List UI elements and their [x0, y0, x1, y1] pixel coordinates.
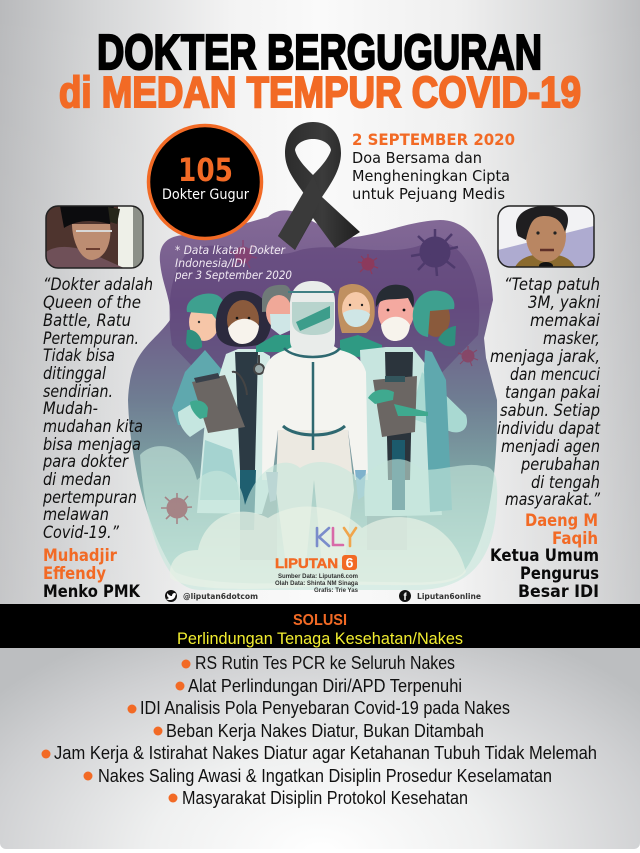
social: twitter: [165, 590, 258, 602]
speaker: Daeng M Faqih: Besar IDI: [518, 582, 599, 601]
person: man behind left: [256, 285, 292, 352]
icon: mourning ribbon: [278, 122, 360, 250]
illustration: dark shade behind team: [169, 240, 479, 385]
icon: small red virus: [358, 254, 378, 274]
stat circle: 105 dokter gugur: Dokter Gugur: [162, 187, 249, 203]
social: facebook: Liputan6online: [417, 591, 481, 601]
illustration: medical team: [172, 281, 467, 565]
illustration: translucent foreground clouds: [140, 446, 497, 590]
speaker: Daeng M Faqih: Daeng M: [525, 511, 598, 530]
icon: virus behind note: [230, 240, 257, 268]
quote: right: individu dapat: [497, 419, 600, 438]
quote: left: Mudah-: [43, 399, 98, 418]
note: data source: [174, 243, 292, 282]
speaker: Muhadjir Effendy: Muhadjir: [43, 546, 118, 565]
text: 2 september 2020: 2 SEPTEMBER 2020: [352, 130, 515, 149]
quote: right: tangan pakai: [505, 383, 600, 402]
quote: left: Queen of the: [43, 293, 141, 312]
item 4: Beban Kerja Nakes Diatur, Bukan Ditambah: [166, 721, 484, 741]
stat circle: 105 dokter gugur: 105: [178, 151, 233, 189]
quote: left: Battle, Ratu: [43, 311, 131, 330]
speaker: Daeng M Faqih: Ketua Umum: [490, 546, 599, 565]
item 7: Masyarakat Disiplin Protokol Kesehatan: [182, 788, 468, 808]
item 6: Nakes Saling Awasi & Ingatkan Disiplin Prosedur Keselamatan: [98, 766, 552, 786]
quote: left: [42, 275, 153, 542]
stat circle: 105 dokter gugur: [148, 126, 262, 238]
credits: Grafis: Trie Yas: [314, 587, 358, 594]
logo: Liputan6: LIPUTAN: [275, 555, 338, 571]
quote: right: menjaga jarak,: [490, 347, 600, 366]
quote: left: pertempuran: [42, 488, 137, 507]
person: blond woman: [338, 284, 382, 358]
speaker: Muhadjir Effendy: Effendy: [43, 564, 106, 583]
item 2: Alat Perlindungan Diri/APD Terpenuhi: [188, 676, 462, 696]
icon: red virus right: [458, 346, 478, 366]
speaker: Daeng M Faqih: Faqih: [552, 529, 598, 548]
quote: left: para dokter: [42, 452, 129, 471]
person: hazmat suit: [262, 281, 368, 565]
quote: left: bisa menjaga: [43, 435, 141, 454]
text: 2 september 2020: Mengheningkan Cipta: [352, 167, 510, 185]
panel header: solusi: Perlindungan Tenaga Kesehatan/Nakes: [177, 629, 463, 648]
quote: right: 3M, yakni: [528, 293, 600, 312]
person: left nurse: [172, 294, 226, 437]
quote: left: Pertempuran.: [43, 329, 139, 348]
background: [0, 0, 640, 604]
quote: right: sabun. Setiap: [500, 401, 600, 420]
speaker: Muhadjir Effendy: [43, 546, 141, 601]
note: data source: * Data Ikatan Dokter: [175, 243, 286, 257]
credits: Sumber Data: Liputan6.com: [278, 573, 358, 580]
quote: left: ditinggal: [43, 364, 106, 383]
note: data source: Indonesia/IDI: [175, 256, 247, 270]
social: twitter: @liputan6dotcom: [183, 591, 258, 601]
item 1: RS Rutin Tes PCR ke Seluruh Nakes: [195, 653, 455, 673]
text: 2 september 2020: [352, 130, 515, 203]
social: facebook: [399, 590, 481, 603]
quote: left: “Dokter adalah: [43, 275, 153, 294]
credits: [275, 573, 358, 594]
quote: left: Covid-19.”: [43, 523, 119, 542]
icon: faded virus lower left: [161, 493, 192, 524]
quote: right: masyarakat.”: [505, 490, 600, 509]
quote: right: perubahan: [520, 455, 600, 474]
quote: right: memakai: [530, 311, 600, 330]
text: 2 september 2020: untuk Pejuang Medis: [352, 185, 505, 203]
credits: Olah Data: Shinta NM Sinaga: [275, 580, 358, 587]
speaker: Daeng M Faqih: Pengurus: [520, 564, 599, 583]
speaker: Daeng M Faqih: [490, 511, 599, 601]
social: facebook: f: [403, 592, 407, 603]
quote: left: Tidak bisa: [43, 346, 115, 365]
icon: left clipboard: [190, 373, 245, 433]
photo: Daeng M Faqih: [498, 206, 594, 270]
note: data source: per 3 September 2020: [174, 268, 292, 282]
illustration: purple backdrop blob: [128, 210, 497, 583]
quote: left: sendirian.: [43, 382, 113, 401]
icon: right clipboard: [368, 376, 428, 437]
quote: right: [490, 275, 600, 509]
logo: KLY: [317, 528, 356, 546]
panel header: solusi: SOLUSI: [293, 612, 347, 629]
logo: Liputan6: 6: [346, 554, 354, 570]
person: right nurse: [413, 291, 456, 512]
icon: virus top right: [411, 229, 458, 276]
quote: right: “Tetap patuh: [504, 275, 600, 294]
quote: right: menjadi agen: [501, 437, 600, 456]
quote: left: melawan: [43, 505, 109, 524]
panel header: solusi: [0, 604, 640, 648]
person: woman with stethoscope: [197, 291, 277, 560]
panel: solutions background: [0, 648, 640, 849]
quote: left: di medan: [43, 470, 111, 489]
title: [59, 25, 581, 117]
photo: Muhadjir Effendy: [46, 206, 143, 268]
quote: right: di tengah: [531, 473, 600, 492]
speaker: Muhadjir Effendy: Menko PMK: [43, 582, 141, 601]
item 3: IDI Analisis Pola Penyebaran Covid-19 pada Nakes: [140, 698, 510, 718]
list: solutions: [42, 653, 597, 808]
quote: right: masker,: [543, 329, 600, 348]
item 5: Jam Kerja & Istirahat Nakes Diatur agar Ketahanan Tubuh Tidak Melemah: [54, 743, 597, 763]
quote: right: dan mencuci: [510, 365, 600, 384]
quote: left: mudahan kita: [43, 417, 143, 436]
person: man on right: [360, 285, 467, 550]
text: 2 september 2020: Doa Bersama dan: [352, 149, 482, 167]
